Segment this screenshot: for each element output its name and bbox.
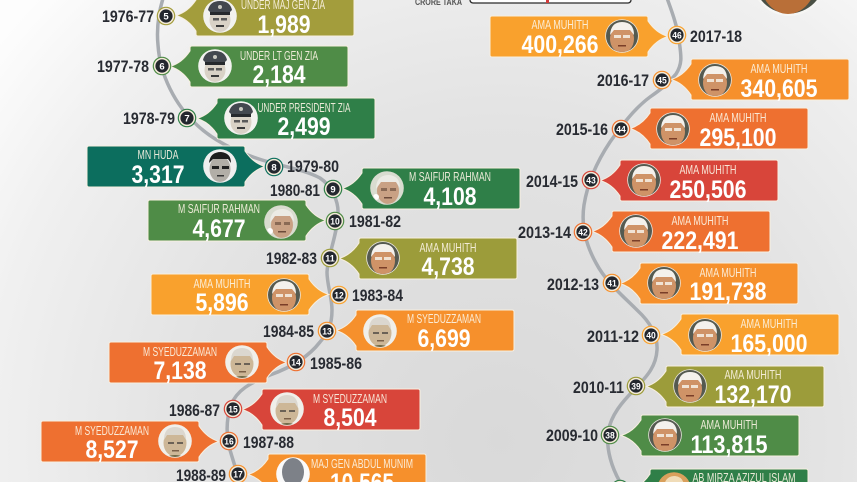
- node: 39: [631, 382, 641, 392]
- value: 1,989: [258, 11, 310, 39]
- card: 2016-17: [597, 59, 849, 103]
- card: 1988-89: [176, 454, 426, 482]
- year: 1986-87: [169, 401, 220, 420]
- node: 7: [184, 114, 190, 124]
- portrait: [370, 171, 404, 205]
- value: 250,506: [670, 176, 746, 204]
- portrait: [224, 101, 258, 135]
- card: 2010-11: [573, 366, 824, 409]
- node: 43: [586, 176, 596, 186]
- value: 7,138: [154, 357, 207, 385]
- node: [627, 377, 645, 395]
- node: [330, 286, 348, 304]
- label: UNDER LT GEN ZIA: [240, 49, 318, 63]
- label: UNDER PRESIDENT ZIA: [258, 101, 351, 115]
- card: 1980-81: [270, 168, 520, 211]
- portrait: [363, 314, 397, 349]
- node: 15: [228, 404, 238, 416]
- label: M SYEDUZZAMAN: [407, 312, 481, 326]
- node: [611, 480, 629, 482]
- node: [603, 274, 621, 292]
- node: [318, 322, 336, 340]
- node: 16: [224, 436, 234, 448]
- node: [326, 212, 344, 230]
- card: 2009-10: [546, 415, 799, 459]
- portrait: [605, 19, 639, 53]
- portrait: [627, 163, 661, 197]
- card: 2011-12: [587, 314, 839, 358]
- card: 1977-78: [97, 46, 348, 89]
- year: 2015-16: [556, 120, 608, 139]
- node: [668, 26, 686, 44]
- year: 2012-13: [547, 275, 599, 294]
- value: 4,108: [424, 183, 477, 211]
- card: 2012-13: [547, 263, 798, 306]
- year: 2009-10: [546, 426, 598, 445]
- year: 2013-14: [518, 223, 571, 242]
- portrait: [647, 266, 681, 300]
- node: 5: [163, 12, 169, 22]
- timeline path: right: [583, 0, 681, 482]
- node: [321, 249, 339, 267]
- label: AMA MUHITH: [680, 163, 736, 177]
- timeline path: left: [157, 0, 338, 482]
- card: 2013-14: [518, 211, 770, 255]
- portrait: [688, 318, 722, 352]
- portrait: [270, 392, 304, 427]
- node: [229, 465, 247, 482]
- year: 1981-82: [349, 212, 401, 231]
- portrait: [203, 149, 237, 183]
- portrait: [276, 457, 310, 482]
- node: 6: [159, 62, 165, 72]
- label: M SAIFUR RAHMAN: [409, 170, 491, 184]
- year: 2017-18: [690, 27, 742, 46]
- card: 2015-16: [556, 108, 808, 152]
- node: 13: [322, 326, 332, 338]
- value: 113,815: [690, 431, 768, 459]
- label: AMA MUHITH: [532, 18, 588, 32]
- year: 2016-17: [597, 71, 649, 90]
- value: 295,100: [700, 124, 776, 152]
- value: 8,527: [86, 436, 138, 464]
- node: 44: [616, 124, 626, 136]
- year: 1979-80: [287, 157, 339, 176]
- node: 46: [672, 30, 682, 42]
- year: 1982-83: [266, 249, 317, 268]
- node: 11: [325, 254, 335, 264]
- year: 1984-85: [263, 322, 314, 341]
- year: 1980-81: [270, 181, 320, 200]
- value: 3,317: [132, 161, 184, 189]
- label: AMA MUHITH: [710, 111, 766, 125]
- card: 1984-85: [263, 310, 514, 353]
- card: 2017-18: [490, 16, 742, 59]
- value: 165,000: [730, 330, 808, 358]
- card: 1978-79: [123, 98, 375, 141]
- label: AMA MUHITH: [194, 277, 250, 291]
- node: 40: [646, 330, 656, 342]
- node: [224, 400, 242, 418]
- value: 191,738: [690, 278, 767, 306]
- portrait: [656, 112, 690, 146]
- card: 1976-77: [102, 0, 354, 39]
- year: 2011-12: [587, 327, 639, 346]
- value: 4,677: [192, 215, 246, 243]
- year: 1987-88: [243, 433, 294, 452]
- value: 400,266: [522, 31, 598, 59]
- node: [220, 432, 238, 450]
- node: [574, 223, 592, 241]
- node: 9: [330, 184, 336, 196]
- label: M SYEDUZZAMAN: [143, 345, 217, 359]
- node: [601, 426, 619, 444]
- portrait: [225, 345, 259, 380]
- portrait: [198, 49, 232, 83]
- value: 2,499: [278, 113, 330, 141]
- portrait: [158, 424, 192, 459]
- portrait: [698, 63, 732, 97]
- year: 1977-78: [97, 57, 149, 76]
- label: AMA MUHITH: [700, 418, 758, 432]
- card: 1983-84: [151, 274, 403, 317]
- label: M SAIFUR RAHMAN: [178, 202, 260, 216]
- label: M SYEDUZZAMAN: [75, 424, 149, 438]
- year: 1983-84: [352, 286, 403, 305]
- node: [642, 326, 660, 344]
- node: [178, 109, 196, 127]
- card: 2014-15: [526, 160, 778, 204]
- value: 132,170: [714, 381, 792, 409]
- value: 222,491: [662, 227, 739, 255]
- node: 12: [334, 290, 344, 302]
- label: AMA MUHITH: [420, 241, 476, 255]
- value: 6,699: [418, 325, 470, 353]
- portrait: [366, 241, 400, 275]
- year: 2014-15: [526, 172, 578, 191]
- node: 17: [233, 470, 243, 480]
- node: 38: [605, 430, 615, 442]
- label: MN HUDA: [138, 148, 179, 162]
- node: [653, 71, 671, 89]
- portrait: top right: [751, 0, 827, 16]
- node: 41: [607, 278, 617, 290]
- year: 1978-79: [123, 109, 175, 128]
- label: AMA MUHITH: [700, 266, 756, 280]
- node: [287, 353, 305, 371]
- card: 1979-80: [87, 146, 339, 189]
- card: 1985-86: [109, 342, 362, 385]
- label: AMA MUHITH: [740, 317, 798, 331]
- year: 1985-86: [310, 354, 362, 373]
- legend: crore taka: [415, 0, 631, 8]
- node: [265, 158, 283, 176]
- card: 1982-83: [266, 238, 517, 281]
- portrait: [267, 278, 301, 312]
- label: AMA MUHITH: [724, 368, 782, 382]
- node: 14: [291, 358, 301, 368]
- node: [324, 180, 342, 198]
- label: M SYEDUZZAMAN: [313, 392, 387, 406]
- node: 45: [657, 76, 667, 86]
- value: 2,184: [252, 61, 306, 89]
- node: [582, 171, 600, 189]
- portrait: [648, 418, 682, 452]
- value: 8,504: [324, 404, 377, 432]
- portrait: [203, 0, 237, 33]
- year: 2010-11: [573, 378, 624, 397]
- node: [153, 57, 171, 75]
- portrait: [264, 205, 298, 239]
- portrait: [673, 369, 707, 403]
- node: [157, 7, 175, 25]
- card: 2008-09: [611, 469, 808, 482]
- portrait: [619, 214, 653, 248]
- card: 1987-88: [41, 421, 294, 464]
- node: 8: [271, 162, 277, 174]
- card: 1981-82: [148, 200, 401, 243]
- value: 340,605: [740, 75, 818, 103]
- label: MAJ GEN ABDUL MUNIM: [311, 457, 413, 471]
- card: 1986-87: [169, 389, 420, 432]
- label: AMA MUHITH: [672, 214, 728, 228]
- portrait: [657, 472, 691, 482]
- node: 42: [578, 228, 588, 238]
- node: [612, 120, 630, 138]
- year: 1976-77: [102, 7, 154, 26]
- label: AMA MUHITH: [750, 62, 808, 76]
- node: 10: [330, 216, 340, 228]
- value: 5,896: [196, 289, 248, 317]
- value: 4,738: [422, 253, 475, 281]
